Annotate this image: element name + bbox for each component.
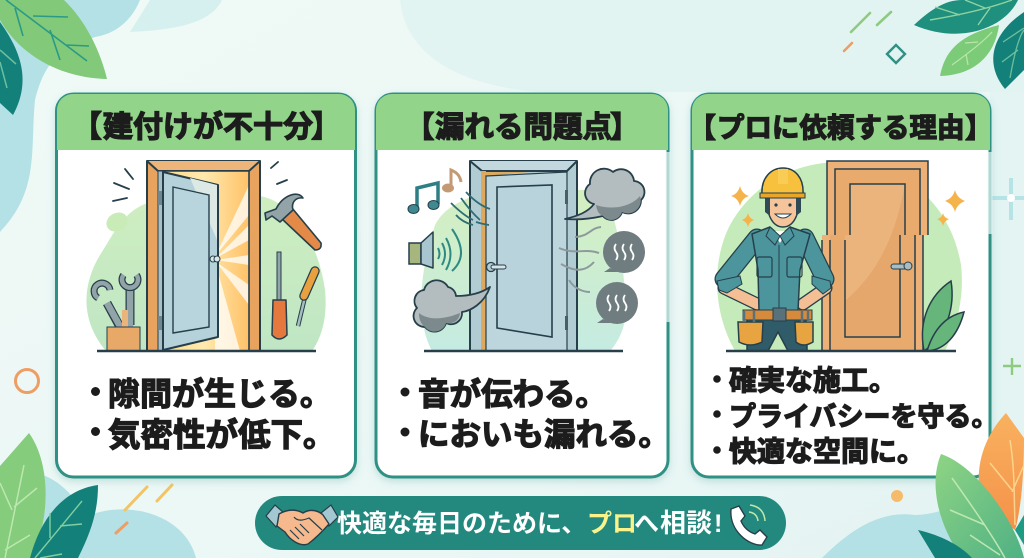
icon: hammer — [265, 194, 321, 250]
icon: construction worker — [717, 168, 831, 351]
banner text: ! — [714, 510, 722, 538]
bullet list: プライバシーを守る。 — [729, 402, 998, 432]
header band — [691, 93, 991, 150]
heading: 【 — [688, 112, 716, 143]
decoration: right side marks — [891, 178, 1024, 502]
icon: cloud lower left — [414, 280, 490, 332]
icon: screwdrivers — [272, 252, 315, 339]
heading: 】 — [610, 111, 640, 144]
border fade — [666, 152, 670, 322]
bullet list — [713, 365, 998, 467]
banner text: 相談 — [660, 508, 712, 538]
heading: 建付けが不十分 — [103, 110, 313, 144]
icon: wrenches in cup — [94, 275, 140, 351]
heading: 】 — [311, 111, 341, 144]
icon: sparkles — [731, 186, 965, 227]
icon: handshake — [266, 505, 338, 545]
decoration: bottom-left leaves and marks — [0, 370, 172, 558]
bullet list — [91, 376, 336, 453]
icon: door — [822, 161, 928, 351]
heading: 漏れる問題点 — [435, 111, 612, 144]
heading: 【 — [405, 111, 435, 144]
bullet list — [400, 376, 670, 452]
bullet list: 気密性が低下。 — [108, 416, 336, 453]
bullet list: 隙間が生じる。 — [108, 376, 332, 412]
banner text: 快適な毎日のために、 — [337, 510, 586, 538]
icon: smell bubble upper — [603, 231, 645, 273]
banner text: へ — [634, 510, 659, 538]
icon: cloud upper right — [565, 169, 644, 220]
illustration: worker beside door — [717, 161, 965, 351]
bullet list: においも漏れる。 — [418, 416, 670, 452]
header band — [375, 93, 669, 150]
heading: 】 — [965, 112, 992, 143]
icon: impact lines — [113, 162, 287, 201]
icon: plant leaves — [922, 281, 964, 351]
icon: phone — [731, 505, 767, 545]
icon: speaker — [409, 229, 461, 271]
icon: smell bubble lower — [596, 282, 638, 324]
illustration: open door with tools — [86, 161, 326, 351]
door handle — [486, 262, 506, 272]
icon: music notes — [408, 170, 461, 214]
heading: プロに依頼する理由 — [717, 112, 964, 143]
bullet list: 音が伝わる。 — [418, 376, 607, 412]
bullet list: 確実な施工。 — [729, 365, 897, 396]
panel: 漏れる問題点 — [375, 93, 670, 477]
decoration: top-left leaves — [0, 0, 107, 115]
bullet list: 快適な空間に。 — [729, 436, 925, 467]
icon: sound waves — [451, 192, 490, 225]
illustration: door leaking sound and odour — [408, 161, 645, 351]
panel: 建付けが不十分 — [56, 93, 356, 477]
panel: プロに依頼する理由 — [688, 93, 998, 477]
header band — [56, 93, 356, 150]
heading: 【 — [72, 111, 102, 144]
border fade — [988, 152, 992, 234]
icon: odour wisps — [559, 227, 601, 292]
decoration: top-right leaves and shapes — [844, 0, 1024, 89]
banner: call to action — [255, 496, 786, 550]
decoration: bottom-right leaves — [918, 413, 1024, 558]
banner text: プロ — [587, 510, 637, 538]
